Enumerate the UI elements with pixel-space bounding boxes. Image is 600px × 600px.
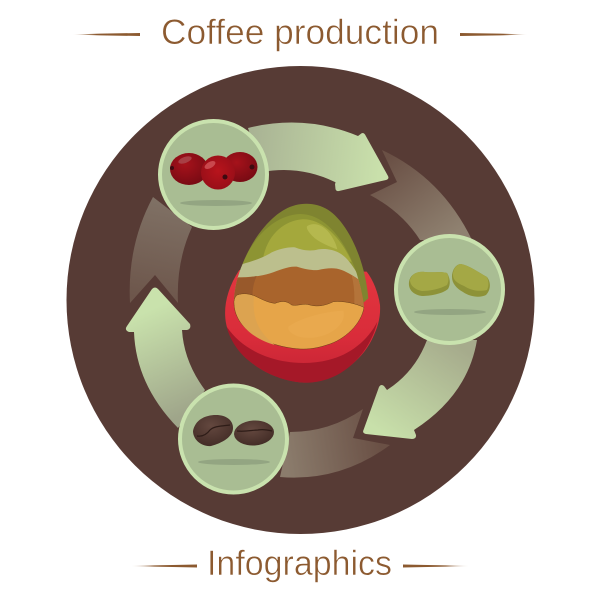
brown layer shade left (234, 276, 256, 299)
berry left calyx (170, 166, 174, 170)
roasted bean left (193, 415, 233, 446)
brown layer shade right (352, 275, 364, 307)
berry left highlight (177, 155, 193, 165)
berry front highlight (203, 159, 217, 171)
circle background (180, 386, 287, 492)
title rule right (460, 33, 527, 36)
green outer skin (242, 204, 368, 303)
green bean right top (453, 264, 488, 291)
bean shadow (414, 309, 486, 315)
berry calyx right (250, 164, 254, 170)
cherry red bowl (225, 270, 380, 383)
faded arc: behind circle to green beans (370, 150, 472, 240)
circle background (160, 121, 267, 228)
green highlight layer (263, 219, 352, 262)
green shine (307, 224, 337, 249)
egg layers (234, 214, 364, 307)
circle background (396, 236, 503, 343)
faded arc: toward roasted beans (280, 409, 390, 478)
berry left (170, 153, 208, 185)
roasted bean left crease (197, 425, 230, 436)
green inner layer (235, 214, 356, 288)
orange seed highlight (288, 311, 344, 338)
green bean left top (410, 272, 448, 291)
title (73, 13, 527, 52)
step circle: red berries (160, 121, 267, 228)
title rule left (73, 33, 140, 36)
berry calyx (222, 174, 228, 180)
berry shadow (180, 200, 252, 206)
orange seed layer (234, 294, 364, 349)
footer (131, 544, 469, 583)
footer rule left (131, 564, 197, 568)
brown parchment layer (234, 266, 364, 306)
roasted bean right (233, 419, 275, 447)
bean shadow (198, 459, 270, 465)
berry front (201, 156, 235, 190)
footer text: Infographics: Infographics (207, 544, 392, 583)
arrow: green beans to roasted beans (363, 340, 477, 439)
arrow: berries to green beans (248, 123, 388, 191)
coffee cherry cross-section (225, 204, 380, 383)
bowl dark lower band (227, 322, 377, 383)
title text: Coffee production: Coffee production (161, 13, 439, 52)
background circle (66, 66, 534, 534)
footer rule right (403, 564, 469, 568)
faded arc: toward red berries (130, 197, 192, 303)
roasted bean right crease (237, 430, 272, 431)
berry back right (222, 152, 258, 182)
pale silver skin layer (230, 247, 367, 297)
green bean left (409, 272, 450, 296)
arrow: roasted beans to berries (126, 288, 205, 428)
green bean right (452, 264, 490, 297)
orange seed shade (234, 294, 275, 345)
step circle: roasted beans (180, 386, 287, 492)
step circle: green beans (396, 236, 503, 343)
